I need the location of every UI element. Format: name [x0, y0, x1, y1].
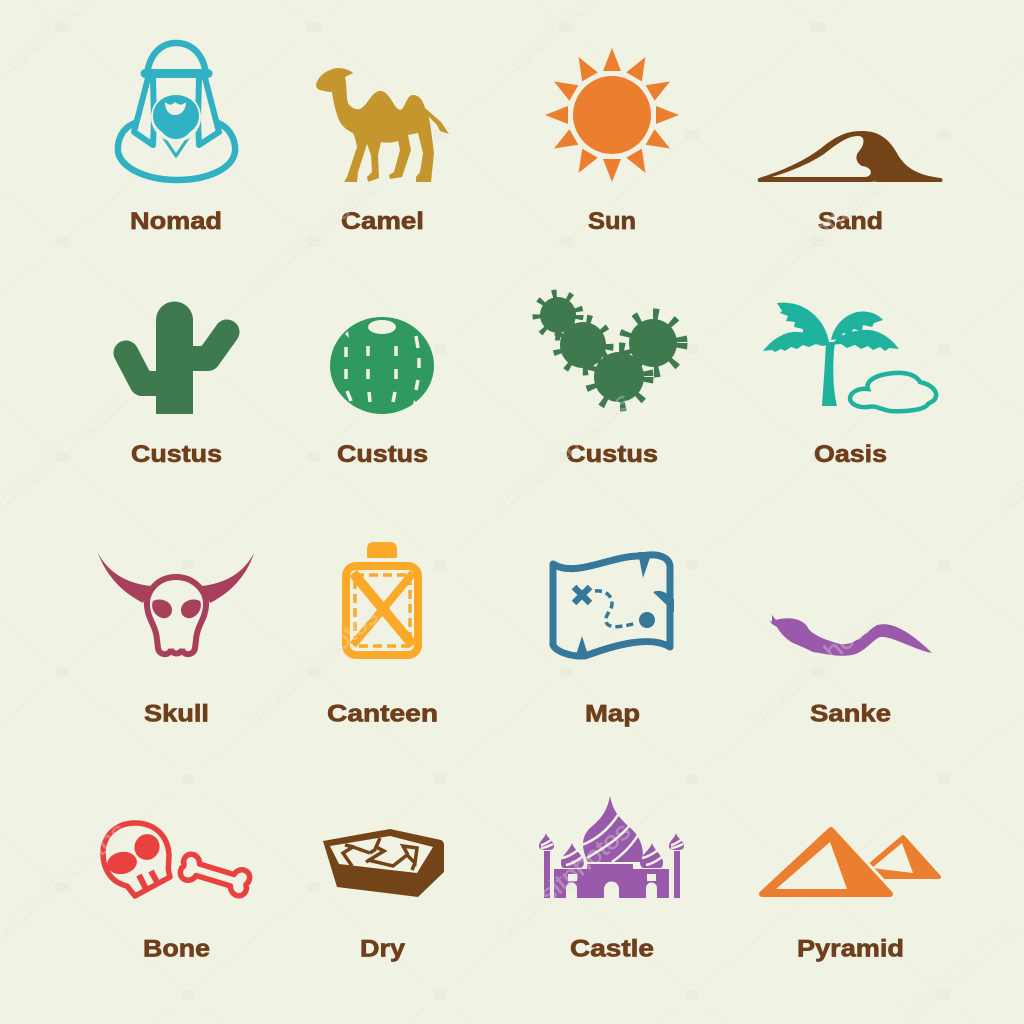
- watermarks: depositphotos: [740, 172, 888, 303]
- panel: dry: [323, 829, 444, 962]
- icon: bull skull: [98, 553, 254, 654]
- panel: nomad: [118, 43, 235, 235]
- label: Sun: Sun: [588, 208, 636, 235]
- panel: skull: [98, 553, 254, 728]
- panel: sun: [545, 48, 679, 235]
- watermarks: depositphotos: [236, 602, 384, 733]
- icon: canteen: [346, 542, 418, 655]
- panel: pyramid: [762, 830, 939, 962]
- icon: mosque castle: [539, 796, 684, 898]
- icon: sun: [545, 48, 679, 182]
- panel: oasis: [763, 303, 936, 468]
- watermarks: depositphotos: [236, 172, 384, 303]
- label: Custus: Custus: [566, 441, 658, 468]
- label: Oasis: Oasis: [814, 441, 887, 468]
- icon: palm and pond: [763, 303, 936, 411]
- panel: cactus 2: [330, 317, 434, 468]
- watermarks: depositphotos: [488, 817, 636, 948]
- icon: snake: [769, 615, 932, 656]
- panel: castle: [539, 796, 684, 962]
- watermarks: depositphotos: [488, 387, 636, 518]
- icon: pyramids: [762, 830, 939, 894]
- panel: snake: [769, 615, 932, 728]
- label: Nomad: Nomad: [130, 208, 222, 235]
- icon: prickly cactus: [537, 294, 682, 406]
- label: Sanke: Sanke: [810, 700, 891, 728]
- icon: sand dune: [758, 131, 942, 182]
- label: Canteen: Canteen: [327, 700, 438, 728]
- panel: cactus 3: [537, 294, 682, 468]
- label: Custus: Custus: [337, 441, 428, 468]
- icon: treasure map: [553, 552, 674, 658]
- icon: skull and bone: [103, 823, 252, 898]
- label: Pyramid: Pyramid: [797, 936, 904, 962]
- label: Sand: Sand: [818, 208, 883, 235]
- label: Dry: Dry: [360, 936, 406, 962]
- label: Custus: Custus: [131, 441, 222, 468]
- label: Skull: Skull: [144, 700, 209, 728]
- icon: barrel cactus: [330, 317, 434, 414]
- icon: nomad: [118, 43, 235, 180]
- icon: saguaro cactus: [126, 302, 227, 414]
- watermarks: depositphotos: [740, 602, 888, 733]
- label: Bone: Bone: [143, 936, 210, 962]
- panel: cactus 1: [126, 302, 227, 468]
- label: Map: Map: [585, 700, 640, 728]
- label: Camel: Camel: [341, 208, 424, 235]
- icon: cracked earth: [323, 829, 444, 897]
- label: Castle: Castle: [570, 936, 654, 962]
- icon: camel: [316, 68, 449, 182]
- panel: sand: [758, 131, 942, 235]
- panel: canteen: [327, 542, 438, 728]
- panel: map: [553, 552, 674, 728]
- panel: bone: [103, 823, 252, 962]
- panel: camel: [316, 68, 449, 235]
